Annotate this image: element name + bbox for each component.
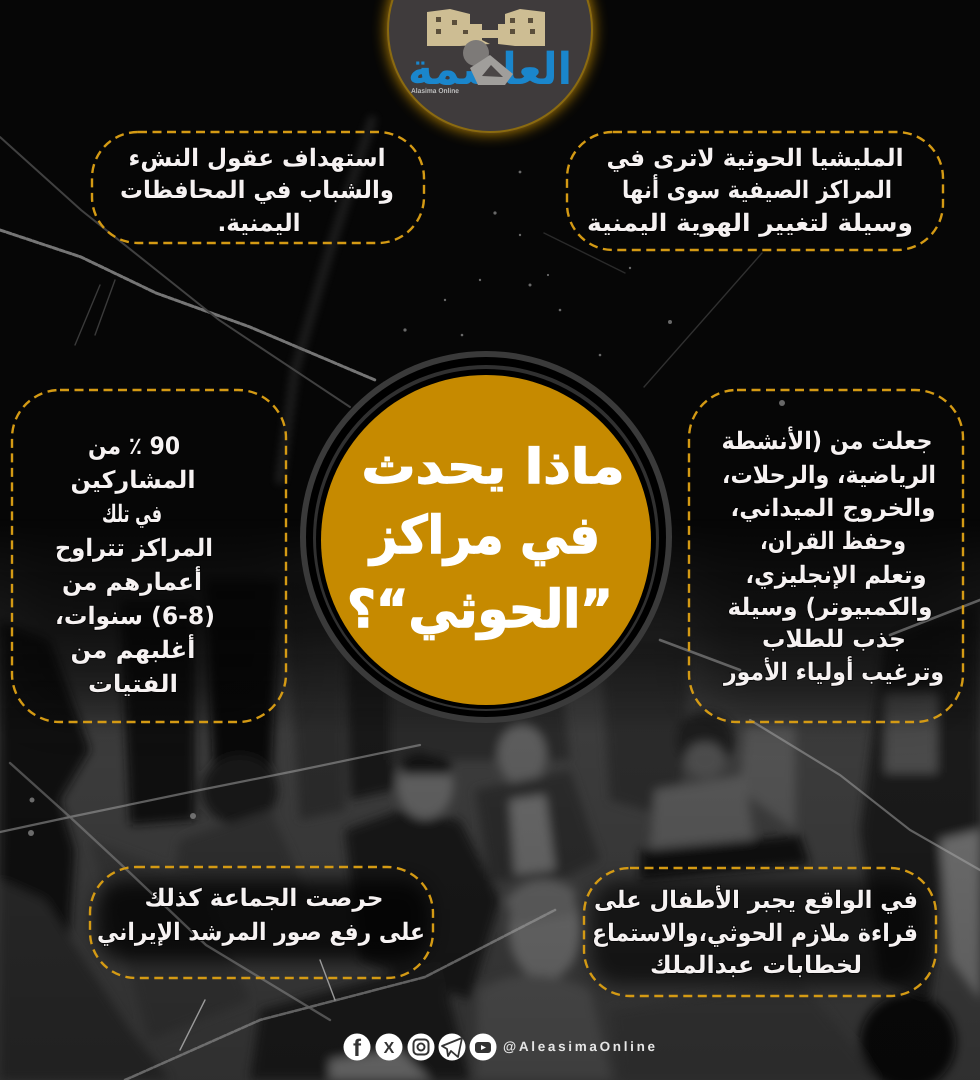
panel text — [592, 885, 918, 979]
lower dark boy and crowd — [250, 960, 470, 1080]
panel text: حرصت الجماعة كذلك — [144, 884, 384, 912]
panel text: قراءة ملازم الحوثي،والاستماع — [592, 919, 918, 947]
panel: right activities — [689, 390, 963, 722]
icon: telegram — [438, 1034, 466, 1060]
panel text: والكمبيوتر) وسيلة — [728, 593, 932, 621]
title text — [347, 439, 624, 640]
boy in jacket — [345, 810, 500, 1000]
social media row — [344, 1034, 655, 1062]
panel text: استهداف عقول النشء — [128, 144, 386, 172]
panel text: 90 ٪ من — [88, 432, 180, 460]
logo tagline: Alasima Online — [411, 87, 459, 95]
dust specks — [28, 171, 785, 836]
panel text: في الواقع يجبر الأطفال على — [594, 885, 918, 914]
panel text: الفتيات — [88, 670, 178, 698]
central title circle — [300, 351, 672, 723]
icon: instagram — [408, 1034, 434, 1060]
right sitting boy — [677, 710, 737, 756]
panel text: (6-8) سنوات، — [55, 602, 215, 630]
standing legs left — [120, 600, 195, 825]
panel text: أعمارهم من — [62, 566, 202, 596]
right standing person — [860, 600, 980, 1000]
icon: x: X — [384, 1040, 395, 1057]
panel text: المراكز تتراوح — [55, 534, 213, 562]
panel: left statistic — [12, 390, 286, 722]
background photo of children — [0, 566, 980, 1080]
panel text: اليمنية. — [218, 209, 300, 237]
icon: old city buildings — [427, 9, 545, 46]
centre standing legs — [390, 660, 570, 760]
boy with backpack — [498, 725, 546, 785]
social handle: @AleasimaOnline — [503, 1039, 655, 1054]
panel text: والشباب في المحافظات — [120, 176, 394, 204]
title text: ”الحوثي“؟ — [347, 580, 613, 640]
panel text — [97, 884, 425, 946]
panel text: على رفع صور المرشد الإيراني — [97, 918, 425, 946]
panel text — [55, 432, 215, 698]
panel: bottom right — [584, 868, 936, 996]
gold glow — [386, 0, 594, 134]
panel text: وترغيب أولياء الأمور — [723, 656, 944, 686]
shadow behind lower text — [95, 880, 430, 960]
logo badge — [386, 0, 594, 134]
panel text — [120, 144, 394, 237]
panel text: في تلك — [102, 500, 162, 528]
panel text: والخروج الميداني، — [730, 494, 936, 522]
panel text: المشاركين — [70, 466, 196, 494]
icon: youtube — [470, 1034, 496, 1060]
panel text: المليشيا الحوثية لاترى في — [606, 144, 904, 172]
front boy — [505, 908, 584, 981]
panel text: جذب للطلاب — [762, 625, 906, 653]
logo wordmark: العاصمة — [408, 44, 572, 95]
panel text: وتعلم الإنجليزي، — [746, 561, 926, 589]
panel: top right — [567, 132, 943, 250]
panel text: وسيلة لتغيير الهوية اليمنية — [587, 209, 913, 237]
panel text: الرياضية، والرحلات، — [722, 461, 936, 489]
panel text: لخطابات عبدالملك — [650, 951, 862, 979]
panel text — [587, 144, 913, 237]
panel text: المراكز الصيفية سوى أنها — [622, 174, 892, 204]
panel text: جعلت من (الأنشطة — [722, 426, 932, 455]
crouching boy left — [202, 755, 278, 825]
title text: ماذا يحدث — [362, 439, 624, 495]
panel text: أغلبهم من — [70, 634, 196, 664]
panel text: وحفظ القران، — [760, 527, 906, 555]
icon: facebook: f — [353, 1035, 362, 1062]
badge circle — [388, 0, 592, 132]
left dark figure — [0, 624, 94, 934]
panel text — [722, 426, 944, 686]
icon: mountain emblem — [463, 40, 513, 85]
panel: bottom left — [90, 867, 433, 978]
icon: facebook — [344, 1034, 370, 1062]
dark ball — [860, 994, 956, 1080]
icon: x — [376, 1034, 402, 1060]
panel: top left — [92, 132, 424, 243]
title text: في مراكز — [367, 506, 600, 566]
